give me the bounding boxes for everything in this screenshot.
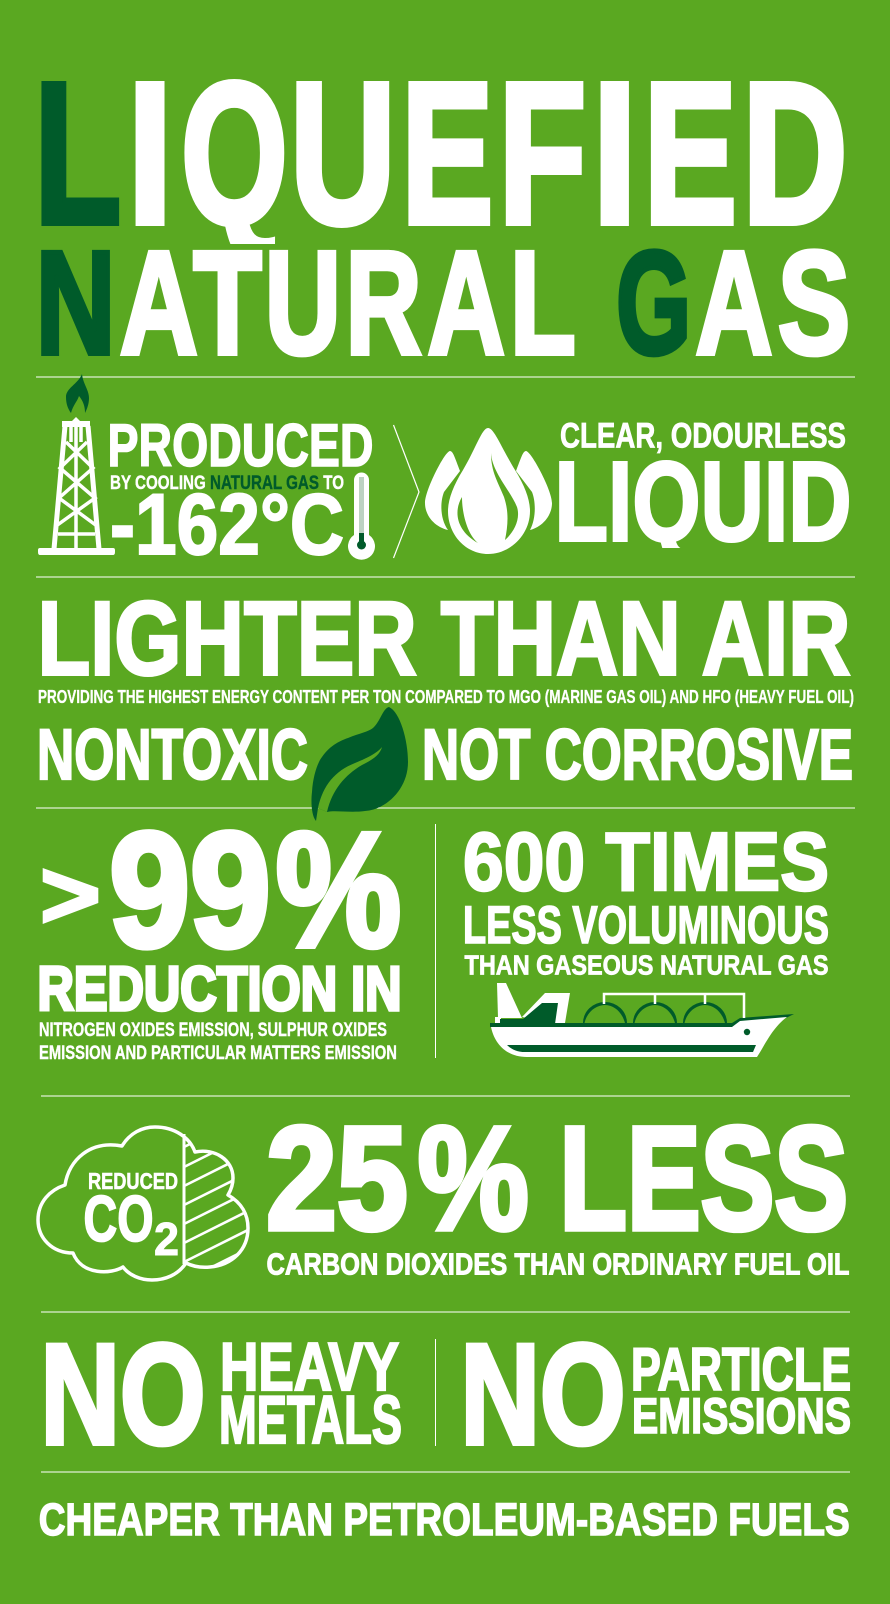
title: A [696, 222, 772, 386]
heading: produced: PRODUCED [108, 412, 374, 479]
title: U [290, 40, 396, 266]
text: nontoxic: NONTOXIC [37, 716, 308, 795]
text: no heavy metals [40, 1316, 402, 1474]
stat: 25% less: % [418, 1097, 529, 1261]
icon: reduced CO2 cloud [36, 1125, 250, 1282]
icon: reduced CO2 cloud: CO [84, 1182, 154, 1255]
stat: >99% reduction [38, 798, 402, 1064]
text: no heavy metals: HEAVY [220, 1329, 399, 1405]
heading: produced: BY COOLING NATURAL GAS TO [110, 472, 344, 494]
title: A [120, 222, 198, 386]
stat: >99% reduction: 99 [109, 798, 271, 981]
text: no heavy metals: NO [40, 1316, 206, 1474]
arrow: chevron [394, 425, 419, 558]
icon: liquid drops [425, 428, 552, 554]
title: Q [181, 40, 288, 266]
title: E [401, 40, 494, 266]
stat: >99% reduction: % [276, 798, 401, 981]
title: F [498, 40, 586, 266]
icon: thermometer [348, 472, 375, 560]
text: no heavy metals: METALS [219, 1382, 402, 1458]
title: L [510, 222, 574, 386]
stat: 600 times less voluminous: THAN GASEOUS NATURAL GAS [464, 950, 828, 980]
icon: LNG carrier ship [490, 983, 794, 1057]
heading: produced: -162°C [110, 477, 344, 573]
stat: 25% less: 25 [266, 1097, 408, 1261]
text: no particle emissions [460, 1316, 851, 1474]
title: D [742, 40, 848, 266]
title: I [127, 40, 173, 266]
title: S [778, 222, 850, 386]
title: I [592, 40, 637, 266]
title: G [616, 222, 691, 386]
title: R [346, 222, 422, 386]
title: U [265, 222, 341, 386]
title: E [644, 40, 737, 266]
text: no particle emissions: NO [460, 1316, 626, 1474]
icon: reduced CO2 cloud: 2 [154, 1213, 179, 1265]
title: L [34, 40, 121, 266]
title: N [36, 222, 116, 386]
heading: clear odourless liquid [559, 422, 849, 548]
stat: 600 times less voluminous [463, 815, 829, 980]
title: A [428, 222, 505, 386]
icon: gas derrick with flame [38, 374, 115, 555]
stat: >99% reduction: NITROGEN OXIDES EMISSION, SULPHUR OXIDES [39, 1020, 387, 1041]
icon: reduced CO2 cloud: REDUCED [88, 1168, 178, 1194]
icon: leaf [311, 707, 408, 821]
title: T [193, 222, 262, 386]
title [41, 79, 848, 358]
heading: produced [108, 412, 374, 573]
stat: 600 times less voluminous: 600 TIMES [463, 815, 829, 908]
stat: >99% reduction: EMISSION AND PARTICULAR MATTERS EMISSION [39, 1043, 397, 1064]
stat: >99% reduction: REDUCTION IN [38, 955, 402, 1024]
